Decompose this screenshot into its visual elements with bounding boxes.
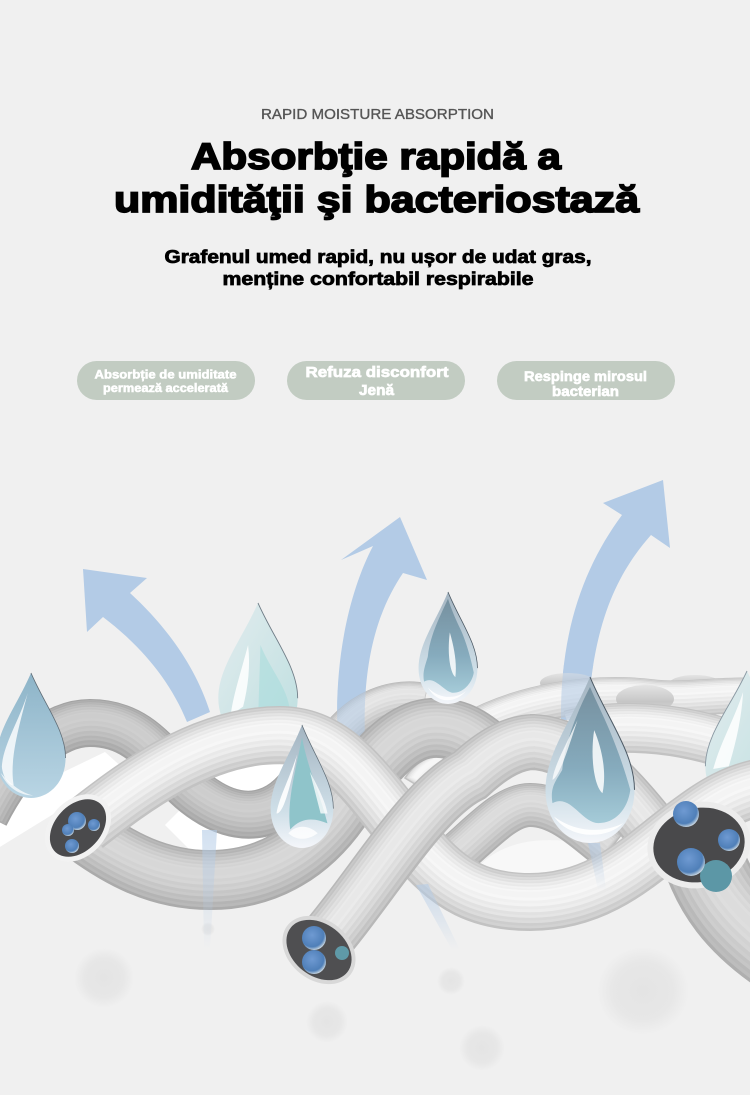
fibre: far back right — [470, 673, 750, 730]
fibre: end of big strand — [530, 735, 660, 840]
droplet: steel large right — [546, 677, 634, 843]
pill: refuse discomfort — [287, 361, 465, 400]
fibre cut end: left — [32, 781, 124, 875]
arrow: centre — [337, 517, 427, 740]
pill: moisture absorption — [77, 361, 255, 400]
floating grey spheres — [74, 922, 689, 1071]
droplet: pale back left — [218, 603, 298, 743]
droplet: steel centre — [419, 592, 477, 704]
arrow: left — [83, 569, 210, 722]
subtitle: Grafenul umed rapid, nu ușor de udat gras, — [164, 247, 592, 267]
title — [114, 136, 639, 220]
fibre: small mid strand — [415, 756, 500, 785]
title: Absorbţie rapidă a — [191, 136, 561, 177]
faint streaks below drops — [202, 830, 606, 950]
fibre: left dark loop — [0, 716, 305, 815]
pill: repel bacterial odour: Respinge mirosul — [524, 368, 647, 384]
fibre cut end: right — [639, 792, 750, 898]
eyebrow heading: RAPID MOISTURE ABSORPTION — [261, 106, 494, 123]
fibre: long white strand — [85, 728, 750, 902]
fibre cut end: centre — [269, 902, 369, 998]
pill: repel bacterial odour: bacterian — [552, 383, 619, 399]
droplet: pale back right — [705, 671, 750, 811]
white gaps behind fibres — [0, 752, 610, 880]
arrow: right — [561, 480, 670, 720]
fibre: lower grey strand — [78, 721, 505, 880]
pill: moisture absorption: permează accelerată — [103, 381, 228, 395]
droplet: front centre left — [271, 725, 333, 848]
subtitle: menține confortabil respirabile — [222, 269, 534, 289]
arrow overlays seen through fibres — [337, 666, 593, 736]
pill: refuse discomfort: Refuza disconfort — [306, 364, 448, 381]
fibre: right dark strand — [700, 841, 750, 960]
fibre: back right band — [570, 721, 750, 760]
pill: repel bacterial odour — [497, 361, 675, 400]
fibre: big front strand — [317, 735, 535, 950]
droplet: far left — [0, 673, 66, 798]
pill: moisture absorption: Absorbție de umiditate — [94, 368, 237, 382]
fibre: inner strand under crossing — [450, 798, 610, 860]
pill: refuse discomfort: Jenă — [359, 382, 395, 399]
fibre: back arch centre — [325, 691, 425, 755]
subtitle — [164, 247, 592, 289]
title: umidităţii şi bacteriostază — [114, 179, 639, 220]
